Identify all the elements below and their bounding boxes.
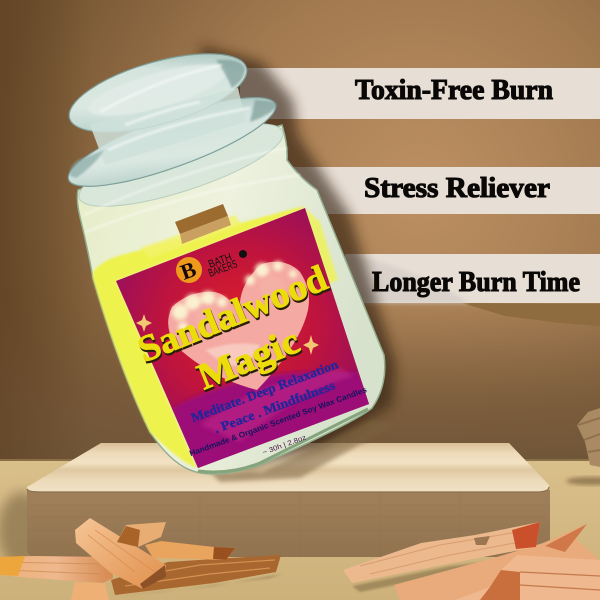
sandalwood chips right (343, 522, 600, 600)
lid neck (90, 88, 246, 165)
branch behind banner (462, 303, 600, 326)
jar shadow (200, 45, 396, 470)
yellow wax right (305, 208, 338, 285)
logo (176, 250, 247, 285)
candle label (116, 208, 380, 480)
benefits text: . Peace . Mindfulness (212, 377, 337, 436)
banner: Stress Reliever: Stress Reliever (364, 173, 550, 204)
banner: Longer Burn Time: Longer Burn Time (372, 267, 580, 298)
burn time and weight: ~ 30h | 2.8oz (262, 434, 308, 457)
heart (168, 261, 309, 390)
product name: Magic (192, 320, 306, 398)
jar body (77, 125, 385, 474)
logo: BAKERS (207, 258, 239, 280)
candle jar (60, 38, 385, 474)
banner: Longer Burn Time (345, 254, 600, 303)
logo: BATH (207, 251, 234, 271)
jute object at right (566, 408, 600, 485)
logo: B (177, 256, 200, 285)
neck ring (71, 107, 291, 223)
wooden wick (175, 204, 231, 244)
banner: Stress Reliever (240, 167, 600, 214)
banner: Toxin-Free Burn: Toxin-Free Burn (355, 75, 553, 106)
lid flange (60, 81, 284, 203)
yellow wax top and left (93, 207, 306, 468)
neck bands (84, 148, 300, 232)
label purple swoosh (172, 368, 369, 468)
glass lid (60, 38, 284, 203)
lid knob (61, 38, 255, 148)
product name: Magic (193, 322, 307, 400)
jar shadow on platform (210, 420, 395, 482)
bottom glass rim (198, 409, 368, 472)
sandalwood chips left (0, 518, 282, 600)
sparkles (136, 314, 152, 332)
banner: Toxin-Free Burn (240, 68, 600, 119)
product name: Sandalwood (133, 260, 334, 373)
wooden platform (0, 443, 550, 568)
tagline: Handmade & Organic Scented Soy Wax Candles (188, 385, 369, 458)
benefits text: Meditate. Deep Relaxation (189, 356, 341, 425)
product name: Sandalwood (132, 258, 333, 371)
